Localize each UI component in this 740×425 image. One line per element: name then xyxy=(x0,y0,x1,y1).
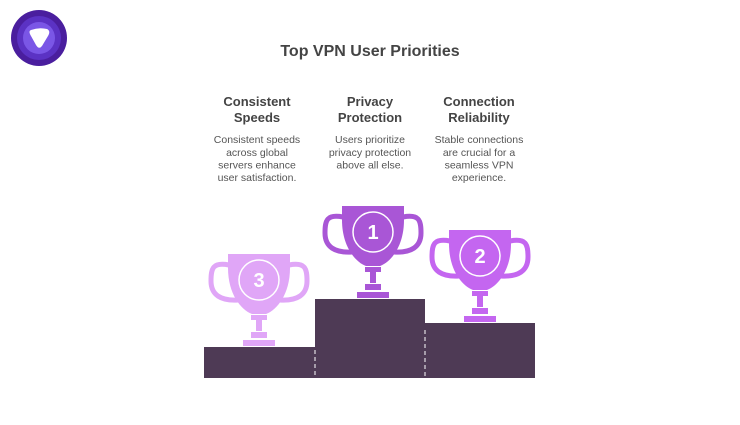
trophy 1 xyxy=(325,206,421,298)
column: connection reliability xyxy=(435,94,523,184)
column: connection reliability: are crucial for a xyxy=(443,147,515,159)
column: connection reliability: Connection xyxy=(443,94,515,109)
column: consistent speeds: Consistent xyxy=(223,94,291,109)
column: privacy protection: privacy protection xyxy=(329,147,411,159)
column: consistent speeds: across global xyxy=(226,147,288,159)
logo xyxy=(11,10,67,66)
column: privacy protection: Users prioritize xyxy=(335,134,405,146)
trophy 3: 3 xyxy=(253,270,265,292)
title: Top VPN User Priorities xyxy=(280,43,460,60)
column: consistent speeds: Speeds xyxy=(234,110,280,125)
column: privacy protection: above all else. xyxy=(336,160,404,172)
column: connection reliability: seamless VPN xyxy=(445,160,513,172)
column: consistent speeds: Consistent speeds xyxy=(214,134,300,146)
trophy 2: 2 xyxy=(474,246,486,268)
column: connection reliability: Reliability xyxy=(448,110,510,125)
column: privacy protection: Privacy xyxy=(347,94,394,109)
trophy 2 xyxy=(432,230,528,322)
column: connection reliability: experience. xyxy=(452,172,506,184)
column: connection reliability: Stable connections xyxy=(435,134,523,146)
column: consistent speeds: servers enhance xyxy=(218,160,296,172)
trophy 3 xyxy=(211,254,307,346)
column: consistent speeds: user satisfaction. xyxy=(218,172,296,184)
podium xyxy=(204,299,535,378)
column: consistent speeds xyxy=(214,94,300,184)
column: privacy protection: Protection xyxy=(338,110,402,125)
column: privacy protection xyxy=(329,94,411,172)
trophy 1: 1 xyxy=(367,222,379,244)
